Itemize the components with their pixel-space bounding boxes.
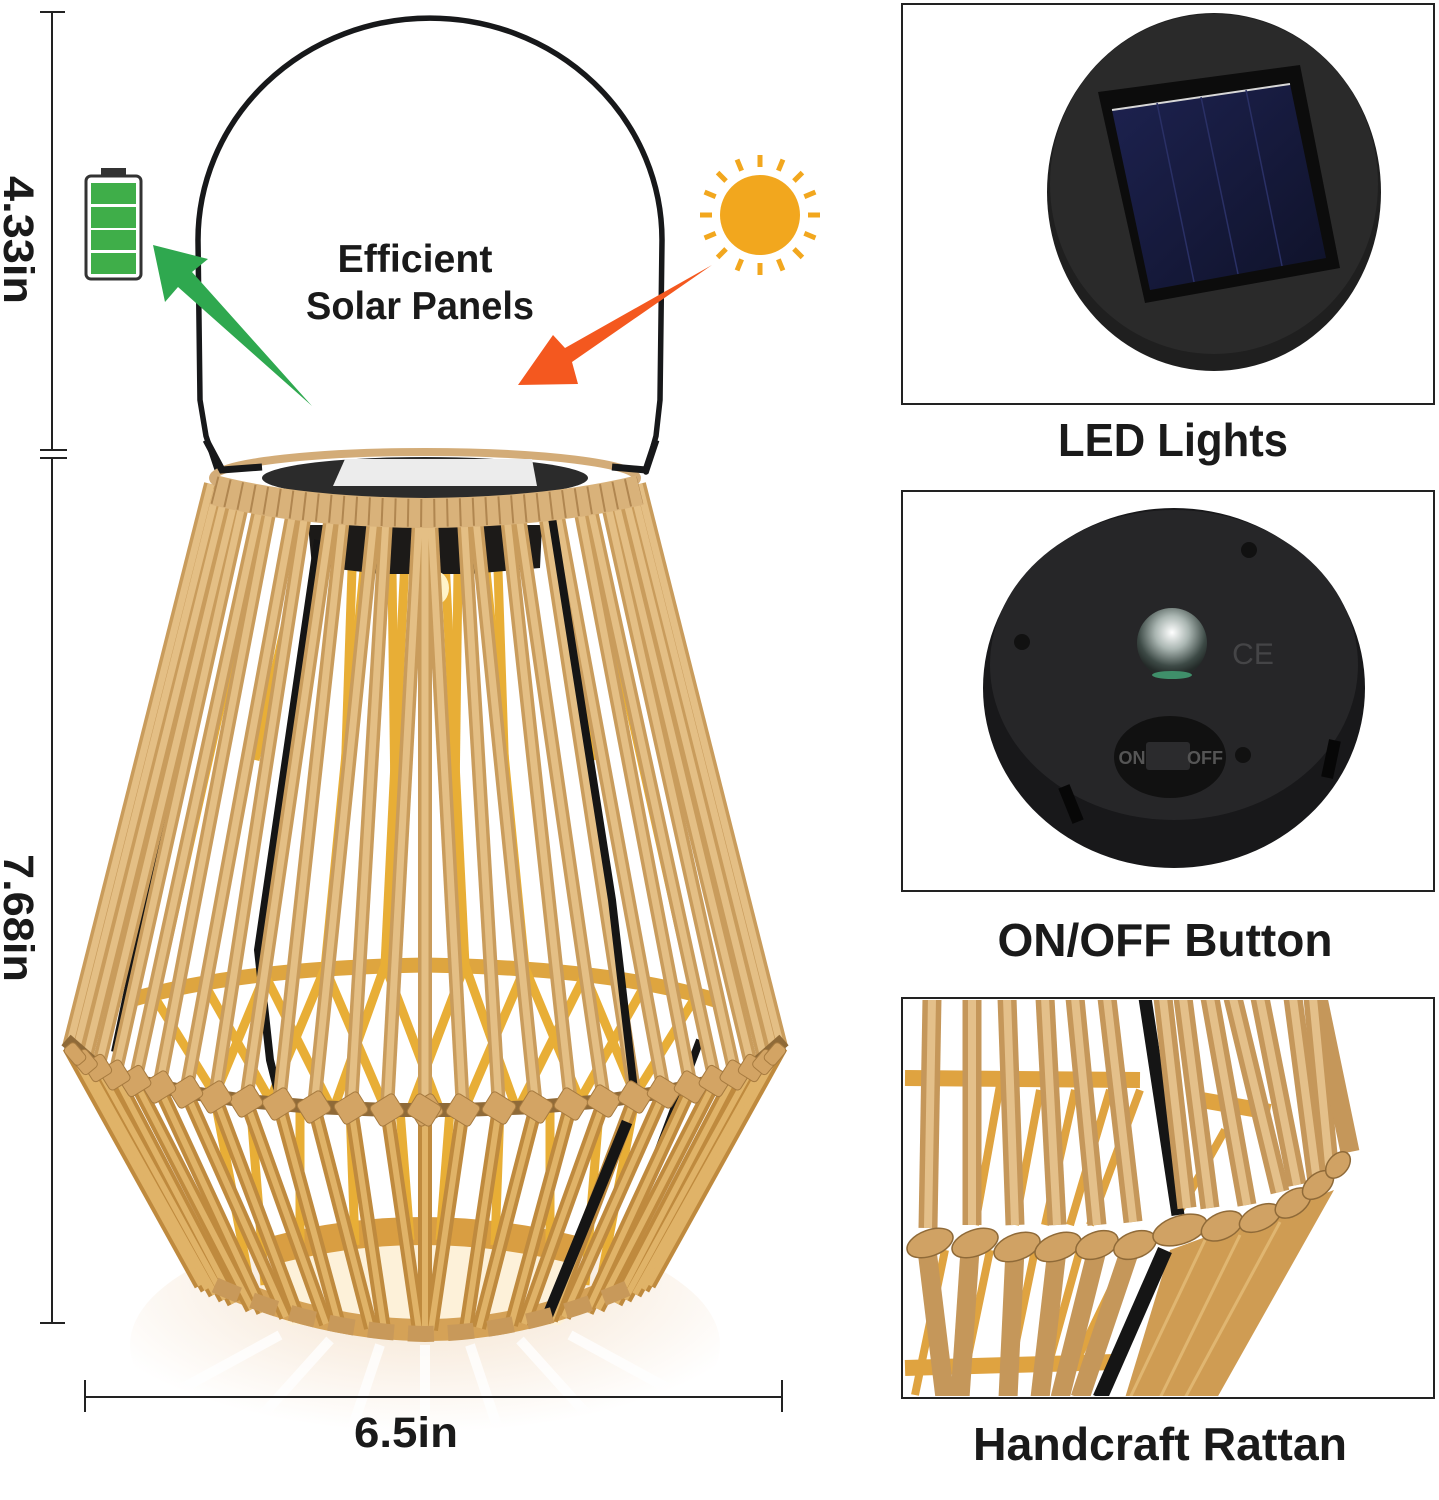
lantern top woven rim [214,490,640,513]
on/off switch: OFF [1187,748,1223,768]
lantern inner black wires [115,540,700,1285]
lantern solar disc [262,457,588,499]
LED bulb [1137,608,1207,679]
disc underside [983,508,1365,868]
lantern bottom rim loops [215,1285,635,1334]
arrow: green to battery [153,245,312,406]
lantern [63,440,787,1334]
lantern middle woven band [63,1040,787,1128]
rattan close-up [903,998,1355,1398]
panel: ON/OFF button [902,491,1434,966]
lantern rattan strands [69,484,781,1330]
arrow: orange from sun [518,265,712,385]
label: ON/OFF Button [998,914,1332,966]
lantern handle [198,18,662,472]
panel: LED lights [902,4,1434,466]
label: efficient solar panels: Solar Panels [306,285,534,328]
floor light glow [130,1220,720,1470]
solar disc [1047,13,1381,371]
on/off switch [1114,716,1226,798]
on/off switch: ON [1118,748,1146,768]
label: Handcraft Rattan [973,1418,1347,1470]
lantern top rim back [213,452,637,504]
disc underside: CE [1232,638,1274,671]
lantern light holder [308,525,542,574]
lantern floor plate [258,1240,590,1325]
lantern back hoops [130,965,715,1330]
label: efficient solar panels: Efficient [338,238,493,281]
panel: handcraft rattan [902,998,1434,1470]
icon: sun [700,155,820,275]
label: LED Lights [1058,414,1288,466]
label: efficient solar panels [306,238,534,328]
width dimension: 6.5in: 6.5in [354,1409,458,1457]
lantern back strands [155,530,695,1285]
handle hooks [206,440,656,470]
lantern bulb glow [421,571,449,605]
icon: battery [86,168,141,279]
lantern right black wires [545,505,634,1322]
